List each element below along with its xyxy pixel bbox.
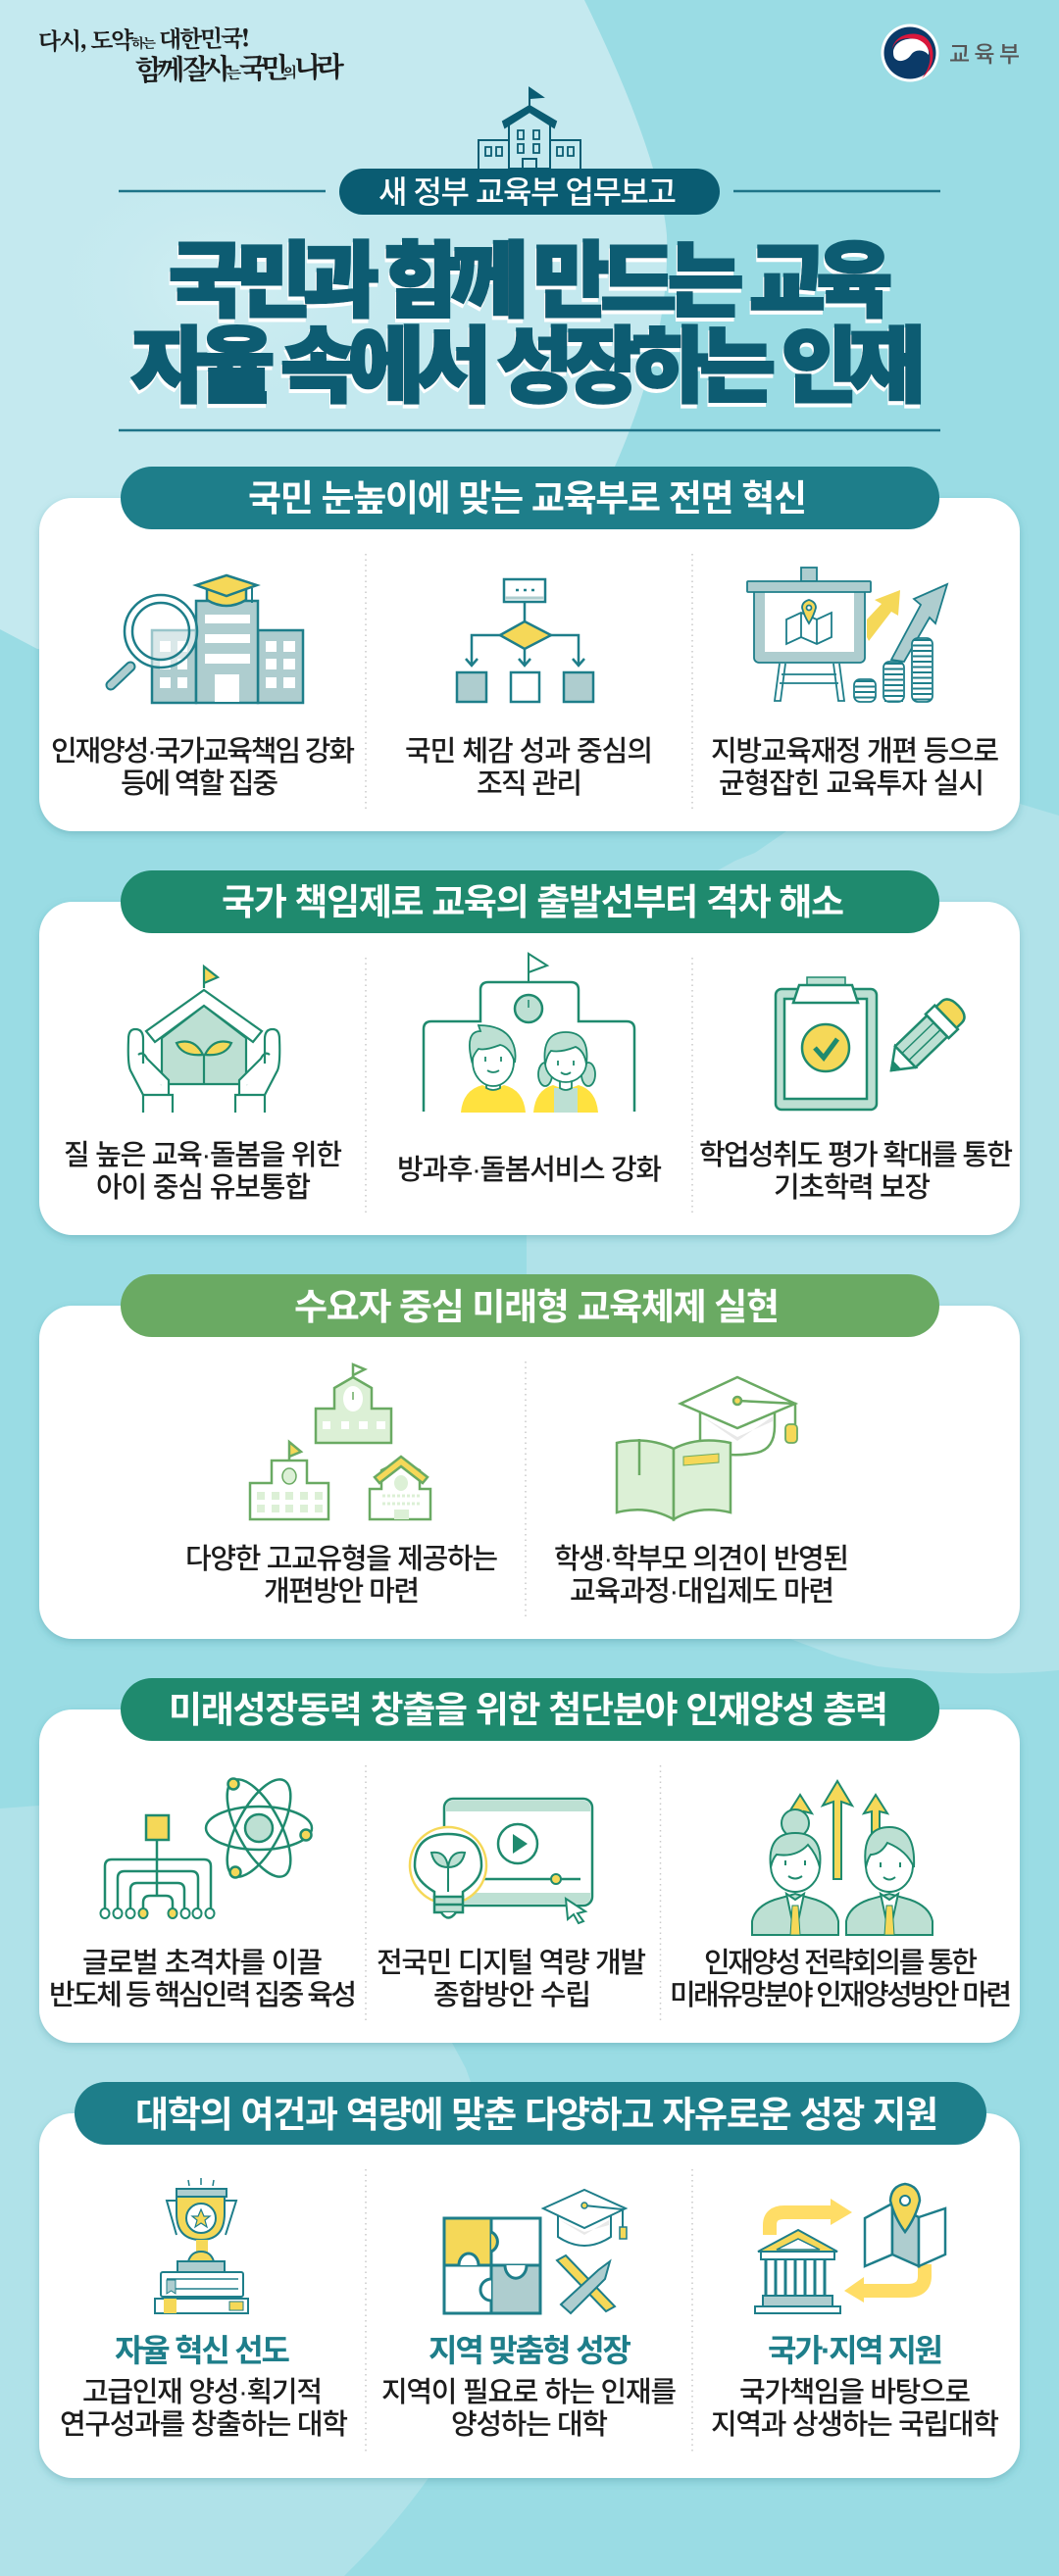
title: 자율 속에서 성장하는 인재 [131, 321, 925, 413]
text: section 2 captions: 학업성취도 평가 확대를 통한 [699, 1139, 1013, 1171]
panel: section 5 [39, 2082, 1020, 2478]
icon: clipboard and pencil [776, 977, 970, 1110]
icon: school with two children [424, 954, 634, 1113]
text: section 2 captions: 질 높은 교육·돌봄을 위한 [64, 1139, 342, 1171]
text: section 4 captions: 전국민 디지털 역량 개발 [377, 1947, 646, 1979]
heading: section 2 [121, 870, 939, 933]
heading: section 4: 미래성장동력 창출을 위한 첨단분야 인재양성 총력 [169, 1690, 888, 1730]
text: section 4 captions: 종합방안 수립 [433, 1979, 591, 2011]
icon: building and magnifier [111, 575, 303, 703]
header subtitle pill: 새 정부 교육부 업무보고 [378, 174, 677, 210]
text: section 3 captions: 학생·학부모 의견이 반영된 [554, 1543, 849, 1575]
text: section 1 captions: 조직 관리 [477, 768, 582, 800]
text: section 2 captions: 기초학력 보장 [774, 1171, 931, 1204]
panel: section 2 [39, 870, 1020, 1235]
text: section 5 captions: 지역 맞춤형 성장 [429, 2333, 631, 2368]
heading: section 5 [75, 2082, 986, 2145]
icon: puzzle, cap and ruler [444, 2190, 627, 2313]
text: section 1 captions: 국민 체감 성과 중심의 [405, 735, 653, 768]
text: section 5 captions: 국가책임을 바탕으로 [739, 2376, 971, 2408]
text: section 2 captions [64, 1139, 1013, 1204]
icon: three schools [250, 1364, 430, 1519]
text: section 5 captions: 지역과 상생하는 국립대학 [711, 2408, 999, 2441]
text: section 1 captions: 인재양성·국가교육책임 강화 [51, 735, 355, 768]
panel: section 1 [39, 467, 1020, 831]
text: section 5 captions: 양성하는 대학 [451, 2408, 608, 2441]
icon: house held by hands with sprout [128, 966, 279, 1113]
text: section 3 captions: 개편방안 마련 [264, 1575, 420, 1608]
text: section 4 captions: 인재양성 전략회의를 통한 [704, 1947, 978, 1979]
text: section 3 captions [185, 1543, 849, 1608]
icon: easel with map and rising arrows [747, 568, 947, 702]
heading: section 1: 국민 눈높이에 맞는 교육부로 전면 혁신 [248, 478, 807, 519]
slogan calligraphy: 함께 잘사는 국민의 나라 [135, 45, 345, 89]
icon: video screen with light bulb [410, 1799, 592, 1923]
text: section 1 captions [51, 735, 999, 800]
heading: section 4 [121, 1678, 939, 1741]
text: section 1 captions: 등에 역할 집중 [121, 768, 278, 800]
icon: graduation cap and open book [617, 1377, 797, 1519]
panel: section 4 [39, 1678, 1020, 2043]
ministry logo: 교육부 [949, 41, 1020, 67]
ministry logo [881, 24, 1020, 82]
icon: flowchart [457, 579, 593, 702]
text: section 5 captions: 지역이 필요로 하는 인재를 [381, 2376, 677, 2408]
text: section 5 captions: 연구성과를 창출하는 대학 [60, 2408, 348, 2441]
slogan calligraphy: 다시, 도약하는 대한민국! [38, 19, 250, 57]
icon: two graduates and upward arrows [752, 1781, 933, 1935]
text: section 4 captions: 반도체 등 핵심인력 집중 육성 [49, 1979, 357, 2011]
text: section 4 captions: 미래유망분야 인재양성방안 마련 [670, 1979, 1012, 2011]
text: section 5 captions [60, 2333, 999, 2441]
heading: section 3 [121, 1274, 939, 1337]
text: section 4 captions [49, 1947, 1012, 2011]
text: section 4 captions: 글로벌 초격차를 이끌 [82, 1947, 323, 1979]
slogan calligraphy [38, 19, 345, 89]
text: section 5 captions: 고급인재 양성·획기적 [82, 2376, 323, 2408]
text: section 1 captions: 균형잡힌 교육투자 실시 [719, 768, 984, 800]
text: section 5 captions: 자율 혁신 선도 [115, 2333, 290, 2368]
title [131, 235, 925, 413]
title: 국민과 함께 만드는 교육 [169, 235, 892, 327]
heading: section 3: 수요자 중심 미래형 교육체제 실현 [294, 1287, 780, 1327]
text: section 1 captions: 지방교육재정 개편 등으로 [711, 735, 999, 768]
heading: section 1 [121, 467, 939, 529]
text: section 2 captions: 아이 중심 유보통합 [96, 1171, 311, 1204]
text: section 5 captions: 국가·지역 지원 [768, 2333, 943, 2368]
icon: trophy on books [155, 2178, 248, 2313]
text: section 3 captions: 다양한 고교유형을 제공하는 [185, 1543, 498, 1575]
icon: national university and map with arrows [755, 2184, 945, 2313]
header subtitle pill [119, 169, 940, 215]
icon: semiconductor tree and atom [100, 1770, 312, 1918]
text: section 2 captions: 방과후·돌봄서비스 강화 [397, 1154, 662, 1186]
panel: section 3 [39, 1274, 1020, 1639]
heading: section 2: 국가 책임제로 교육의 출발선부터 격차 해소 [222, 882, 844, 922]
heading: section 5: 대학의 여건과 역량에 맞춘 다양하고 자유로운 성장 지원 [135, 2095, 938, 2135]
icon: header school building [479, 88, 580, 169]
text: section 3 captions: 교육과정·대입제도 마련 [570, 1575, 834, 1608]
